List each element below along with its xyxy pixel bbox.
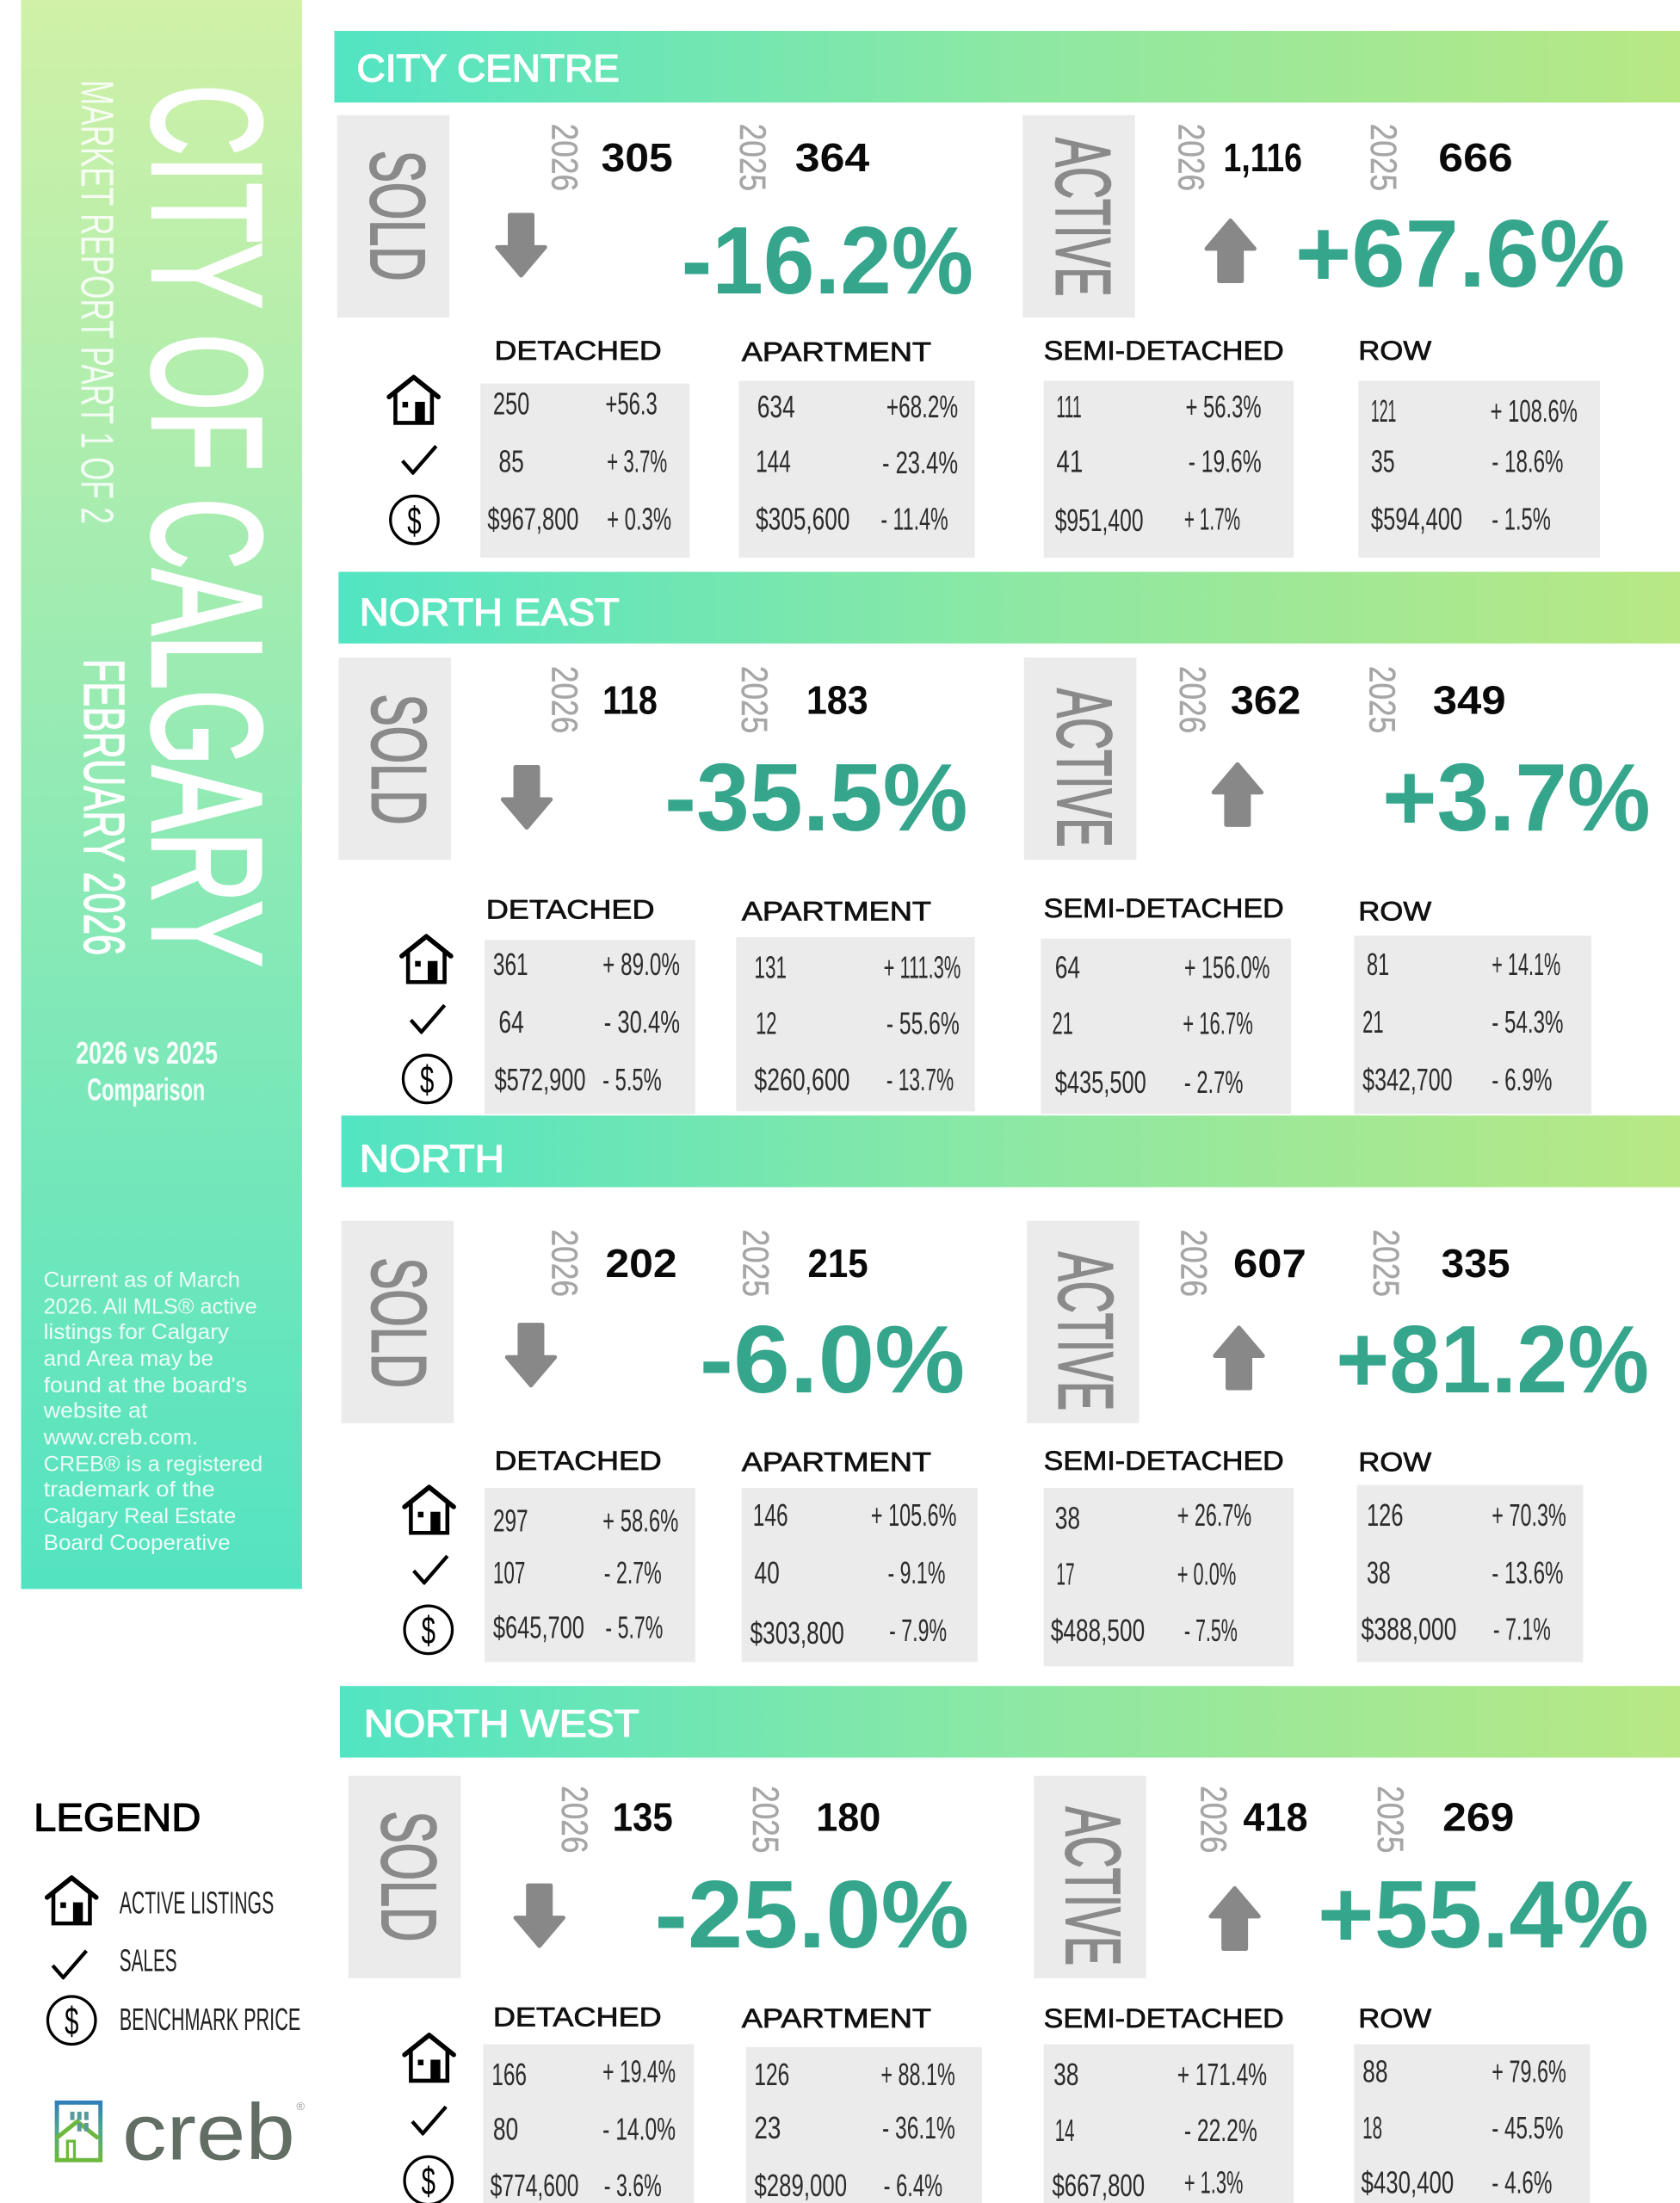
table: row: - 45.5% <box>1492 2110 1564 2145</box>
sold summary <box>342 1221 965 1423</box>
table: semi-detached: - 7.5% <box>1184 1613 1238 1648</box>
active summary: +67.6% <box>1295 201 1625 307</box>
table: semi-detached: + 0.0% <box>1177 1557 1236 1592</box>
table: row: $430,400 <box>1362 2165 1454 2200</box>
table: apartment: APARTMENT <box>742 2003 931 2033</box>
table: apartment: - 7.9% <box>889 1613 947 1648</box>
sold summary: 2026 <box>554 1786 595 1853</box>
table: row: $388,000 <box>1362 1611 1456 1646</box>
table: semi-detached: SEMI-DETACHED <box>1044 336 1284 366</box>
table: apartment: $305,600 <box>756 502 849 537</box>
logo: creb <box>56 2087 305 2176</box>
sold summary: -16.2% <box>682 207 973 314</box>
table: apartment: $289,000 <box>754 2168 847 2203</box>
sold summary: SOLD <box>354 151 440 281</box>
sold summary: 364 <box>795 135 869 180</box>
table: row: + 14.1% <box>1492 947 1560 982</box>
table: row: 121 <box>1371 393 1396 429</box>
table: detached: - 30.4% <box>604 1004 680 1040</box>
table: semi-detached: + 171.4% <box>1177 2057 1267 2092</box>
legend: sales: SALES <box>120 1943 177 1978</box>
table: semi-detached: + 16.7% <box>1183 1006 1253 1041</box>
active summary: 362 <box>1231 677 1300 722</box>
table: apartment: $260,600 <box>754 1062 849 1097</box>
table: detached <box>483 2002 694 2203</box>
row icons: $ <box>422 2159 435 2203</box>
table: semi-detached <box>1041 893 1291 1114</box>
table: row: + 70.3% <box>1492 1497 1566 1533</box>
table: row: - 1.5% <box>1492 502 1551 537</box>
table: detached: DETACHED <box>493 2002 662 2032</box>
sold summary: 183 <box>806 677 868 722</box>
table: semi-detached: 111 <box>1056 389 1082 424</box>
table: row: 126 <box>1367 1497 1403 1533</box>
table: apartment: + 105.6% <box>871 1497 956 1533</box>
sold summary: SOLD <box>355 1257 441 1388</box>
table: row: - 13.6% <box>1492 1555 1564 1590</box>
active summary <box>1027 1221 1649 1423</box>
table: row: 81 <box>1367 947 1389 982</box>
table: semi-detached: SEMI-DETACHED <box>1044 893 1284 923</box>
table: apartment: 144 <box>756 444 791 479</box>
table: row <box>1354 2003 1590 2203</box>
active summary: +3.7% <box>1382 744 1651 851</box>
comparison note <box>76 1035 218 1107</box>
active summary: ACTIVE <box>1041 688 1127 847</box>
sold summary: 305 <box>602 135 673 180</box>
legend heading: LEGEND <box>34 1795 201 1839</box>
table: row: ROW <box>1358 336 1432 366</box>
table: row: $342,700 <box>1362 1062 1453 1097</box>
active summary: 607 <box>1233 1241 1306 1286</box>
table: detached: + 89.0% <box>602 947 680 982</box>
table: row <box>1354 896 1591 1114</box>
active summary: 2026 <box>1170 124 1211 191</box>
table: row: - 7.1% <box>1493 1611 1551 1646</box>
comparison note: Comparison <box>87 1071 205 1107</box>
table: detached: - 5.7% <box>605 1610 663 1645</box>
band: North East heading <box>338 571 1680 644</box>
active summary: 418 <box>1243 1794 1307 1839</box>
active summary: 2025 <box>1366 1230 1406 1297</box>
comparison note: 2026 vs 2025 <box>76 1035 218 1071</box>
table: apartment: - 55.6% <box>886 1006 960 1041</box>
table: apartment <box>742 2003 982 2203</box>
sold summary: 2025 <box>745 1786 786 1853</box>
table: semi-detached: 38 <box>1055 1500 1080 1535</box>
sold summary: 2025 <box>732 124 773 191</box>
band: North East heading: NORTH EAST <box>360 592 620 634</box>
sold summary: 2026 <box>544 666 584 733</box>
sold summary: -25.0% <box>655 1861 969 1968</box>
active summary: 2026 <box>1174 1230 1214 1297</box>
table: row: - 18.6% <box>1492 444 1564 479</box>
table: detached: DETACHED <box>486 895 655 925</box>
table: apartment: + 111.3% <box>884 949 960 984</box>
table: apartment: APARTMENT <box>742 896 931 926</box>
table: apartment: APARTMENT <box>742 1447 931 1477</box>
active summary: ACTIVE <box>1042 1252 1128 1410</box>
table: semi-detached: + 56.3% <box>1185 389 1262 424</box>
table: semi-detached <box>1044 2003 1294 2203</box>
table: row: 35 <box>1371 444 1395 479</box>
table: semi-detached: 14 <box>1055 2113 1075 2148</box>
table: detached: 80 <box>493 2112 518 2147</box>
band: City Centre heading <box>334 31 1680 102</box>
table: row: + 79.6% <box>1492 2054 1566 2089</box>
table: row: 18 <box>1362 2110 1382 2145</box>
band: North West heading <box>340 1686 1680 1757</box>
table: apartment <box>742 1447 978 1662</box>
table: detached: + 19.4% <box>602 2054 676 2089</box>
table: semi-detached: 41 <box>1056 444 1083 479</box>
table: semi-detached: SEMI-DETACHED <box>1044 2003 1284 2033</box>
legend: benchmark price: $ <box>65 1999 78 2043</box>
active summary: 1,116 <box>1224 135 1302 180</box>
table: row: 38 <box>1367 1555 1391 1590</box>
active summary <box>1022 115 1625 318</box>
table: row: $594,400 <box>1371 502 1462 537</box>
table: semi-detached: + 26.7% <box>1177 1497 1251 1533</box>
sold summary <box>349 1776 969 1978</box>
band: North heading: NORTH <box>360 1139 504 1181</box>
table: detached: 85 <box>498 444 524 479</box>
active summary: ACTIVE <box>1049 1807 1135 1965</box>
table: semi-detached: $435,500 <box>1055 1064 1146 1100</box>
table: semi-detached: 38 <box>1053 2057 1078 2092</box>
table: apartment: 23 <box>754 2110 781 2145</box>
table: row <box>1357 1447 1583 1662</box>
table: detached: DETACHED <box>495 336 662 366</box>
active summary: 269 <box>1442 1794 1514 1839</box>
table: semi-detached: $488,500 <box>1051 1613 1145 1648</box>
active summary <box>1034 1776 1649 1978</box>
table: row: + 108.6% <box>1491 393 1578 429</box>
legend: active listings <box>47 1878 274 1923</box>
table: apartment: 126 <box>754 2057 789 2092</box>
table: semi-detached: + 156.0% <box>1184 949 1269 984</box>
table: detached: $774,600 <box>491 2168 578 2203</box>
table: row: - 6.9% <box>1492 1062 1552 1097</box>
table: apartment: + 88.1% <box>880 2057 955 2092</box>
active summary: 349 <box>1433 677 1506 722</box>
row icons <box>405 1487 454 1654</box>
sold summary: SOLD <box>365 1811 451 1941</box>
table: row: - 4.6% <box>1492 2165 1552 2200</box>
date: February 2026: FEBRUARY 2026 <box>71 659 136 955</box>
table: semi-detached <box>1044 1446 1294 1666</box>
table: semi-detached: + 1.3% <box>1184 2165 1243 2200</box>
active summary: +55.4% <box>1318 1861 1649 1968</box>
table: detached: 64 <box>498 1004 524 1040</box>
legend: active listings: ACTIVE LISTINGS <box>120 1885 274 1921</box>
table: apartment <box>738 337 975 558</box>
active summary: 2025 <box>1362 666 1402 733</box>
table: detached: + 3.7% <box>607 444 667 479</box>
row icons <box>405 2035 454 2203</box>
legend <box>34 1795 300 2045</box>
active summary: 666 <box>1438 135 1513 180</box>
table: apartment: APARTMENT <box>742 337 931 367</box>
table: detached: +56.3 <box>605 386 658 422</box>
active summary: 2026 <box>1193 1786 1233 1853</box>
band: North West heading: NORTH WEST <box>364 1703 639 1745</box>
table: semi-detached <box>1044 336 1294 558</box>
disclaimer text: trademark of the <box>44 1478 215 1502</box>
sold summary: 118 <box>602 677 658 722</box>
table: apartment: - 23.4% <box>882 445 958 480</box>
disclaimer text: found at the board's <box>44 1373 247 1398</box>
table: detached: + 0.3% <box>607 502 671 537</box>
table: detached: 107 <box>493 1555 525 1590</box>
sold summary: 2026 <box>544 124 584 191</box>
table: detached: $967,800 <box>487 502 578 537</box>
sold summary: -6.0% <box>700 1306 965 1413</box>
disclaimer text: and Area may be <box>44 1347 213 1371</box>
disclaimer text: 2026. All MLS® active <box>44 1295 257 1319</box>
disclaimer text <box>43 1268 262 1555</box>
legend: sales <box>52 1943 177 1978</box>
table: row: - 54.3% <box>1492 1004 1564 1040</box>
table: apartment: - 6.4% <box>884 2168 942 2203</box>
legend: benchmark price <box>47 1996 300 2045</box>
table: row: ROW <box>1358 2003 1432 2033</box>
disclaimer text: website at <box>43 1398 147 1422</box>
table: apartment: 12 <box>756 1006 777 1041</box>
table: row: 88 <box>1362 2054 1388 2089</box>
sold summary <box>337 115 973 318</box>
panel: City Centre <box>334 31 1680 558</box>
row icons <box>402 936 451 1103</box>
table: detached: 166 <box>491 2057 527 2092</box>
sold summary: 180 <box>816 1794 880 1839</box>
table: detached: DETACHED <box>495 1446 662 1476</box>
table: apartment: +68.2% <box>886 389 958 424</box>
panel: North West <box>340 1686 1680 2203</box>
title: City of Calgary: CITY OF CALGARY <box>120 84 293 966</box>
disclaimer text: Current as of March <box>44 1268 240 1293</box>
logo: creb: creb <box>122 2087 295 2176</box>
sold summary: -35.5% <box>664 744 968 851</box>
disclaimer text: CREB® is a registered <box>44 1452 262 1476</box>
table: row: ROW <box>1358 1447 1432 1477</box>
table: apartment: $303,800 <box>750 1615 844 1651</box>
table: semi-detached: - 22.2% <box>1184 2113 1257 2148</box>
table: semi-detached: - 19.6% <box>1189 444 1262 479</box>
sold summary: 215 <box>807 1241 868 1286</box>
table: detached: 361 <box>493 947 528 982</box>
sold summary: SOLD <box>355 694 441 824</box>
table: apartment: 131 <box>754 949 787 984</box>
table: semi-detached: $667,800 <box>1052 2168 1145 2203</box>
panel: North <box>342 1115 1680 1666</box>
table: row <box>1358 336 1600 558</box>
table: detached <box>485 1446 695 1662</box>
row icons: $ <box>420 1058 434 1102</box>
legend: benchmark price: BENCHMARK PRICE <box>120 2002 300 2037</box>
table: semi-detached: $951,400 <box>1055 503 1144 538</box>
disclaimer text: Calgary Real Estate <box>44 1504 236 1528</box>
table: row: ROW <box>1358 896 1432 926</box>
table: detached: - 5.5% <box>602 1062 662 1097</box>
disclaimer text: www.creb.com. <box>43 1425 198 1449</box>
row icons: $ <box>407 498 422 542</box>
row icons: $ <box>422 1608 435 1652</box>
table: apartment: - 11.4% <box>880 502 948 537</box>
active summary: 2026 <box>1172 666 1213 733</box>
table: detached <box>485 895 695 1114</box>
table: semi-detached: + 1.7% <box>1184 502 1240 537</box>
band: City Centre heading: CITY CENTRE <box>357 48 620 90</box>
sold summary: 202 <box>605 1241 677 1286</box>
sold summary: 135 <box>613 1794 673 1839</box>
table: apartment: 146 <box>753 1497 788 1533</box>
active summary: 2025 <box>1370 1786 1411 1853</box>
logo: creb: ® <box>296 2100 305 2113</box>
disclaimer text: listings for Calgary <box>44 1320 229 1344</box>
active summary: +81.2% <box>1336 1306 1649 1413</box>
table: apartment: 40 <box>754 1555 780 1590</box>
table: detached: $572,900 <box>495 1062 586 1097</box>
table: detached: 250 <box>493 386 529 422</box>
table: detached: $645,700 <box>493 1610 584 1645</box>
table: apartment: - 36.1% <box>882 2110 955 2145</box>
table: apartment <box>736 896 975 1111</box>
table: semi-detached: 64 <box>1055 949 1080 984</box>
table: apartment: 634 <box>757 389 795 424</box>
table: detached <box>480 336 689 558</box>
sold summary: 2025 <box>734 666 775 733</box>
table: detached: + 58.6% <box>602 1503 678 1539</box>
sold summary: 2025 <box>735 1230 775 1297</box>
active summary <box>1024 657 1651 860</box>
panel: North East <box>338 571 1680 1114</box>
table: detached: 297 <box>493 1503 528 1539</box>
table: detached: - 3.6% <box>604 2168 662 2203</box>
sold summary <box>338 657 968 860</box>
sold summary: 2026 <box>544 1230 584 1297</box>
table: detached: - 2.7% <box>604 1555 662 1590</box>
band: North heading <box>342 1115 1680 1188</box>
table: row: 21 <box>1362 1004 1384 1040</box>
disclaimer text: Board Cooperative <box>44 1531 231 1555</box>
active summary: 2025 <box>1363 124 1404 191</box>
table: semi-detached: - 2.7% <box>1184 1064 1243 1100</box>
panel: sidebar <box>21 0 302 1589</box>
table: semi-detached: 17 <box>1056 1557 1075 1592</box>
table: semi-detached: 21 <box>1052 1006 1073 1041</box>
subtitle: market report part: MARKET REPORT PART 1 OF 2 <box>71 80 123 524</box>
row icons <box>389 377 438 544</box>
active summary: 335 <box>1442 1241 1510 1286</box>
active summary: ACTIVE <box>1039 138 1125 296</box>
table: detached: - 14.0% <box>602 2112 676 2147</box>
table: semi-detached: SEMI-DETACHED <box>1044 1446 1284 1476</box>
table: apartment: - 13.7% <box>886 1062 954 1097</box>
table: apartment: - 9.1% <box>887 1555 945 1590</box>
